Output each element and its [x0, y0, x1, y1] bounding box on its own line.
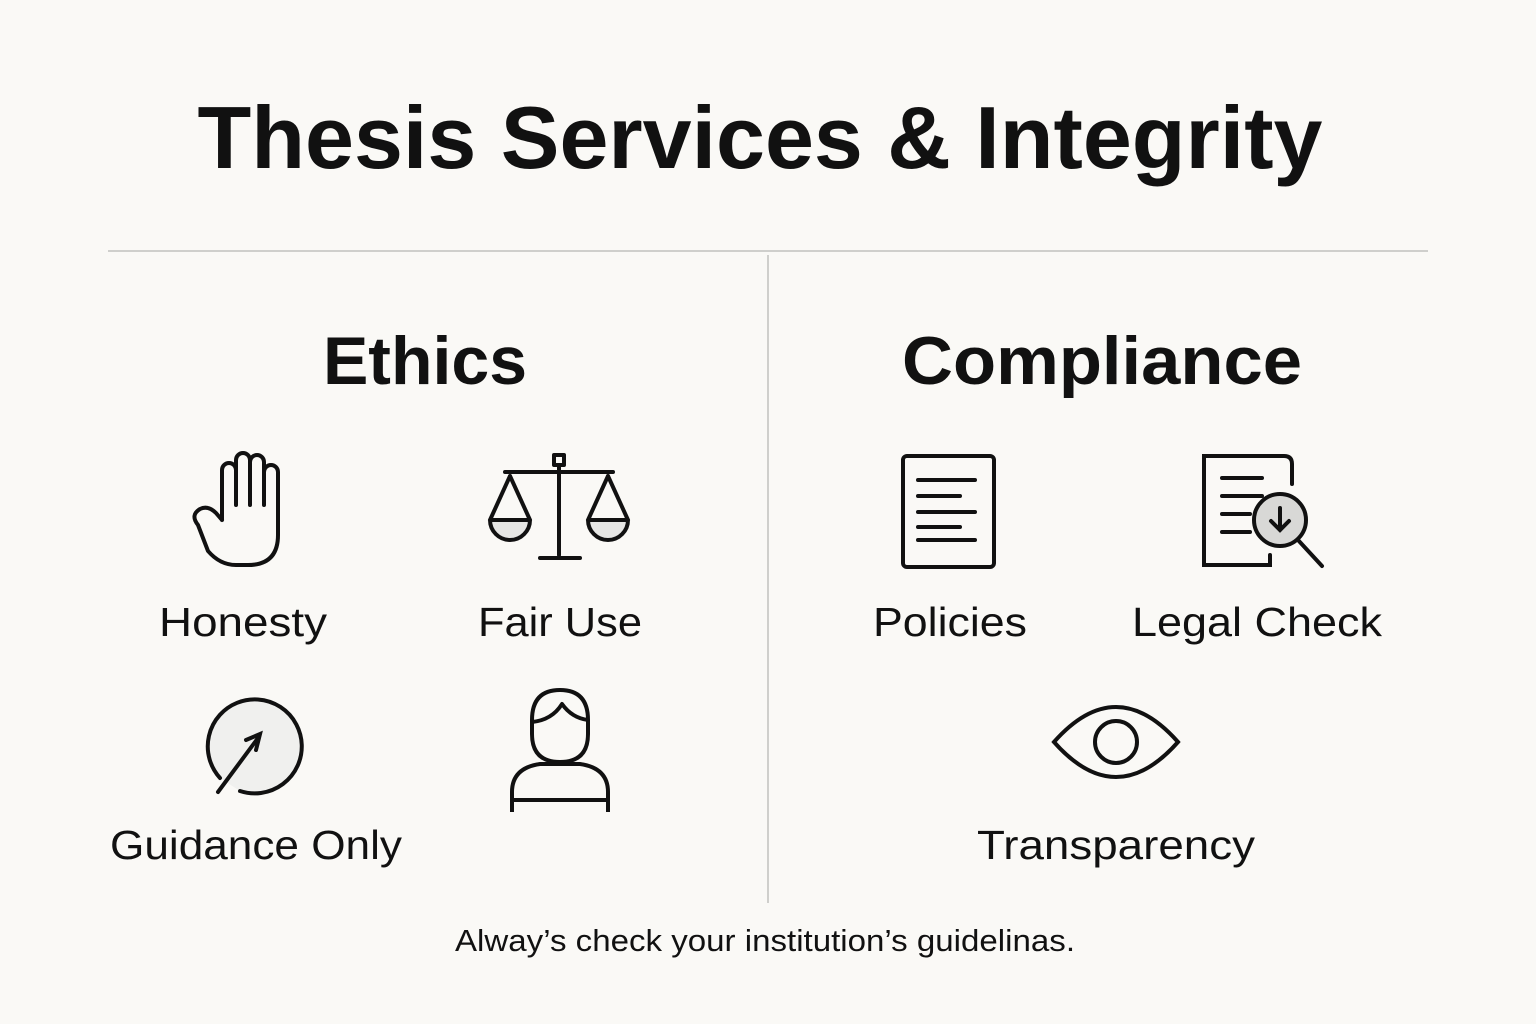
label: Honesty: Honesty: [159, 599, 328, 645]
heading: Compliance: Compliance: [902, 323, 1302, 399]
title: Thesis Services & Integrity: [198, 88, 1323, 187]
icon: hand: [194, 453, 278, 565]
icon: policies document: [903, 456, 994, 567]
label: Policies: Policies: [873, 599, 1027, 645]
heading: Ethics: Ethics: [323, 323, 527, 399]
icon: scales: [490, 455, 628, 558]
icon: legal check: [1204, 456, 1322, 566]
icon: compass: [208, 699, 302, 793]
label: Fair Use: Fair Use: [478, 599, 642, 645]
icon: eye: [1054, 707, 1178, 777]
label: Transparency: Transparency: [977, 822, 1256, 868]
label: Guidance Only: Guidance Only: [110, 822, 403, 868]
label: Legal Check: Legal Check: [1132, 599, 1383, 645]
icon: person: [512, 690, 608, 812]
footer note: Alway’s check your institution’s guidelinas.: [455, 923, 1075, 958]
